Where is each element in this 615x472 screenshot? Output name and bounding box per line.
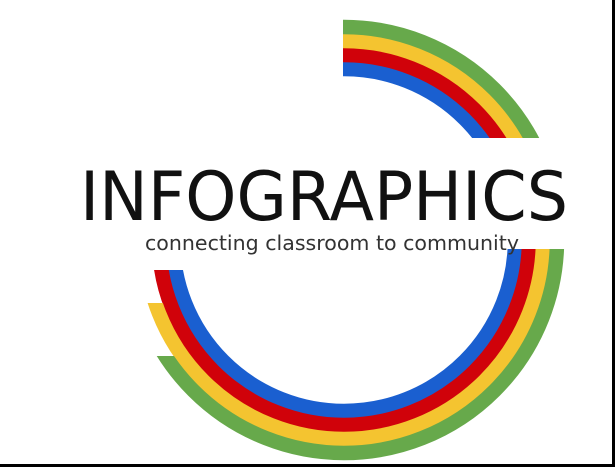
subtitle: connecting classroom to community	[145, 231, 519, 255]
title: INFOGRAPHICS	[80, 158, 568, 237]
arc: top rainbow	[343, 20, 540, 138]
arc: bottom rainbow	[148, 249, 564, 460]
